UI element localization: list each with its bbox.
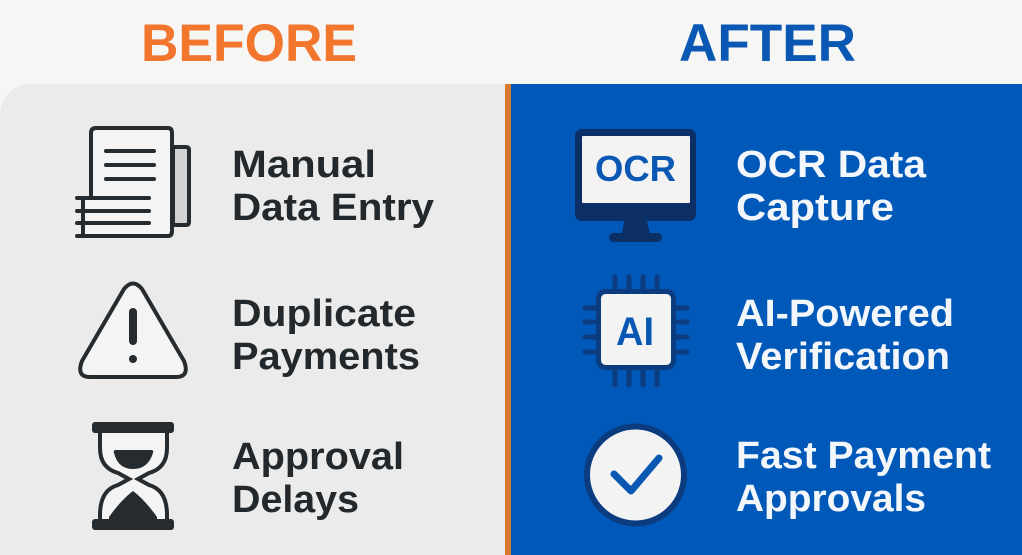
label: fast payment approvals: Fast Payment [736,435,991,477]
panel: before [0,84,505,555]
label: manual data entry [232,144,434,229]
label: duplicate payments: Payments [232,336,420,378]
icon: OCR monitor: OCR [595,148,676,189]
label: fast payment approvals: Approvals [736,478,926,520]
label: approval delays: Delays [232,479,359,521]
label: duplicate payments: Duplicate [232,293,416,335]
heading: after: AFTER [679,14,856,73]
label: OCR data capture: Capture [736,187,894,229]
icon: check circle [587,426,684,524]
icon: AI chip: AI [616,310,654,354]
label: approval delays [232,436,404,521]
heading: before: BEFORE [141,14,357,73]
label: manual data entry: Data Entry [232,187,434,229]
icon: hourglass [92,422,174,530]
icon: warning triangle [80,284,186,377]
label: manual data entry: Manual [232,144,376,186]
label: OCR data capture: OCR Data [736,144,927,186]
label: AI-powered verification [736,293,954,378]
label: approval delays: Approval [232,436,404,478]
label: AI-powered verification: AI-Powered [736,293,954,335]
icon: AI chip [585,277,687,385]
label: duplicate payments [232,293,420,378]
icon: OCR monitor [575,129,696,242]
panel: after [511,84,1022,555]
label: OCR data capture [736,144,927,229]
label: fast payment approvals [736,435,991,520]
center divider [505,84,511,555]
icon: documents [77,128,189,236]
label: AI-powered verification: Verification [736,336,950,378]
